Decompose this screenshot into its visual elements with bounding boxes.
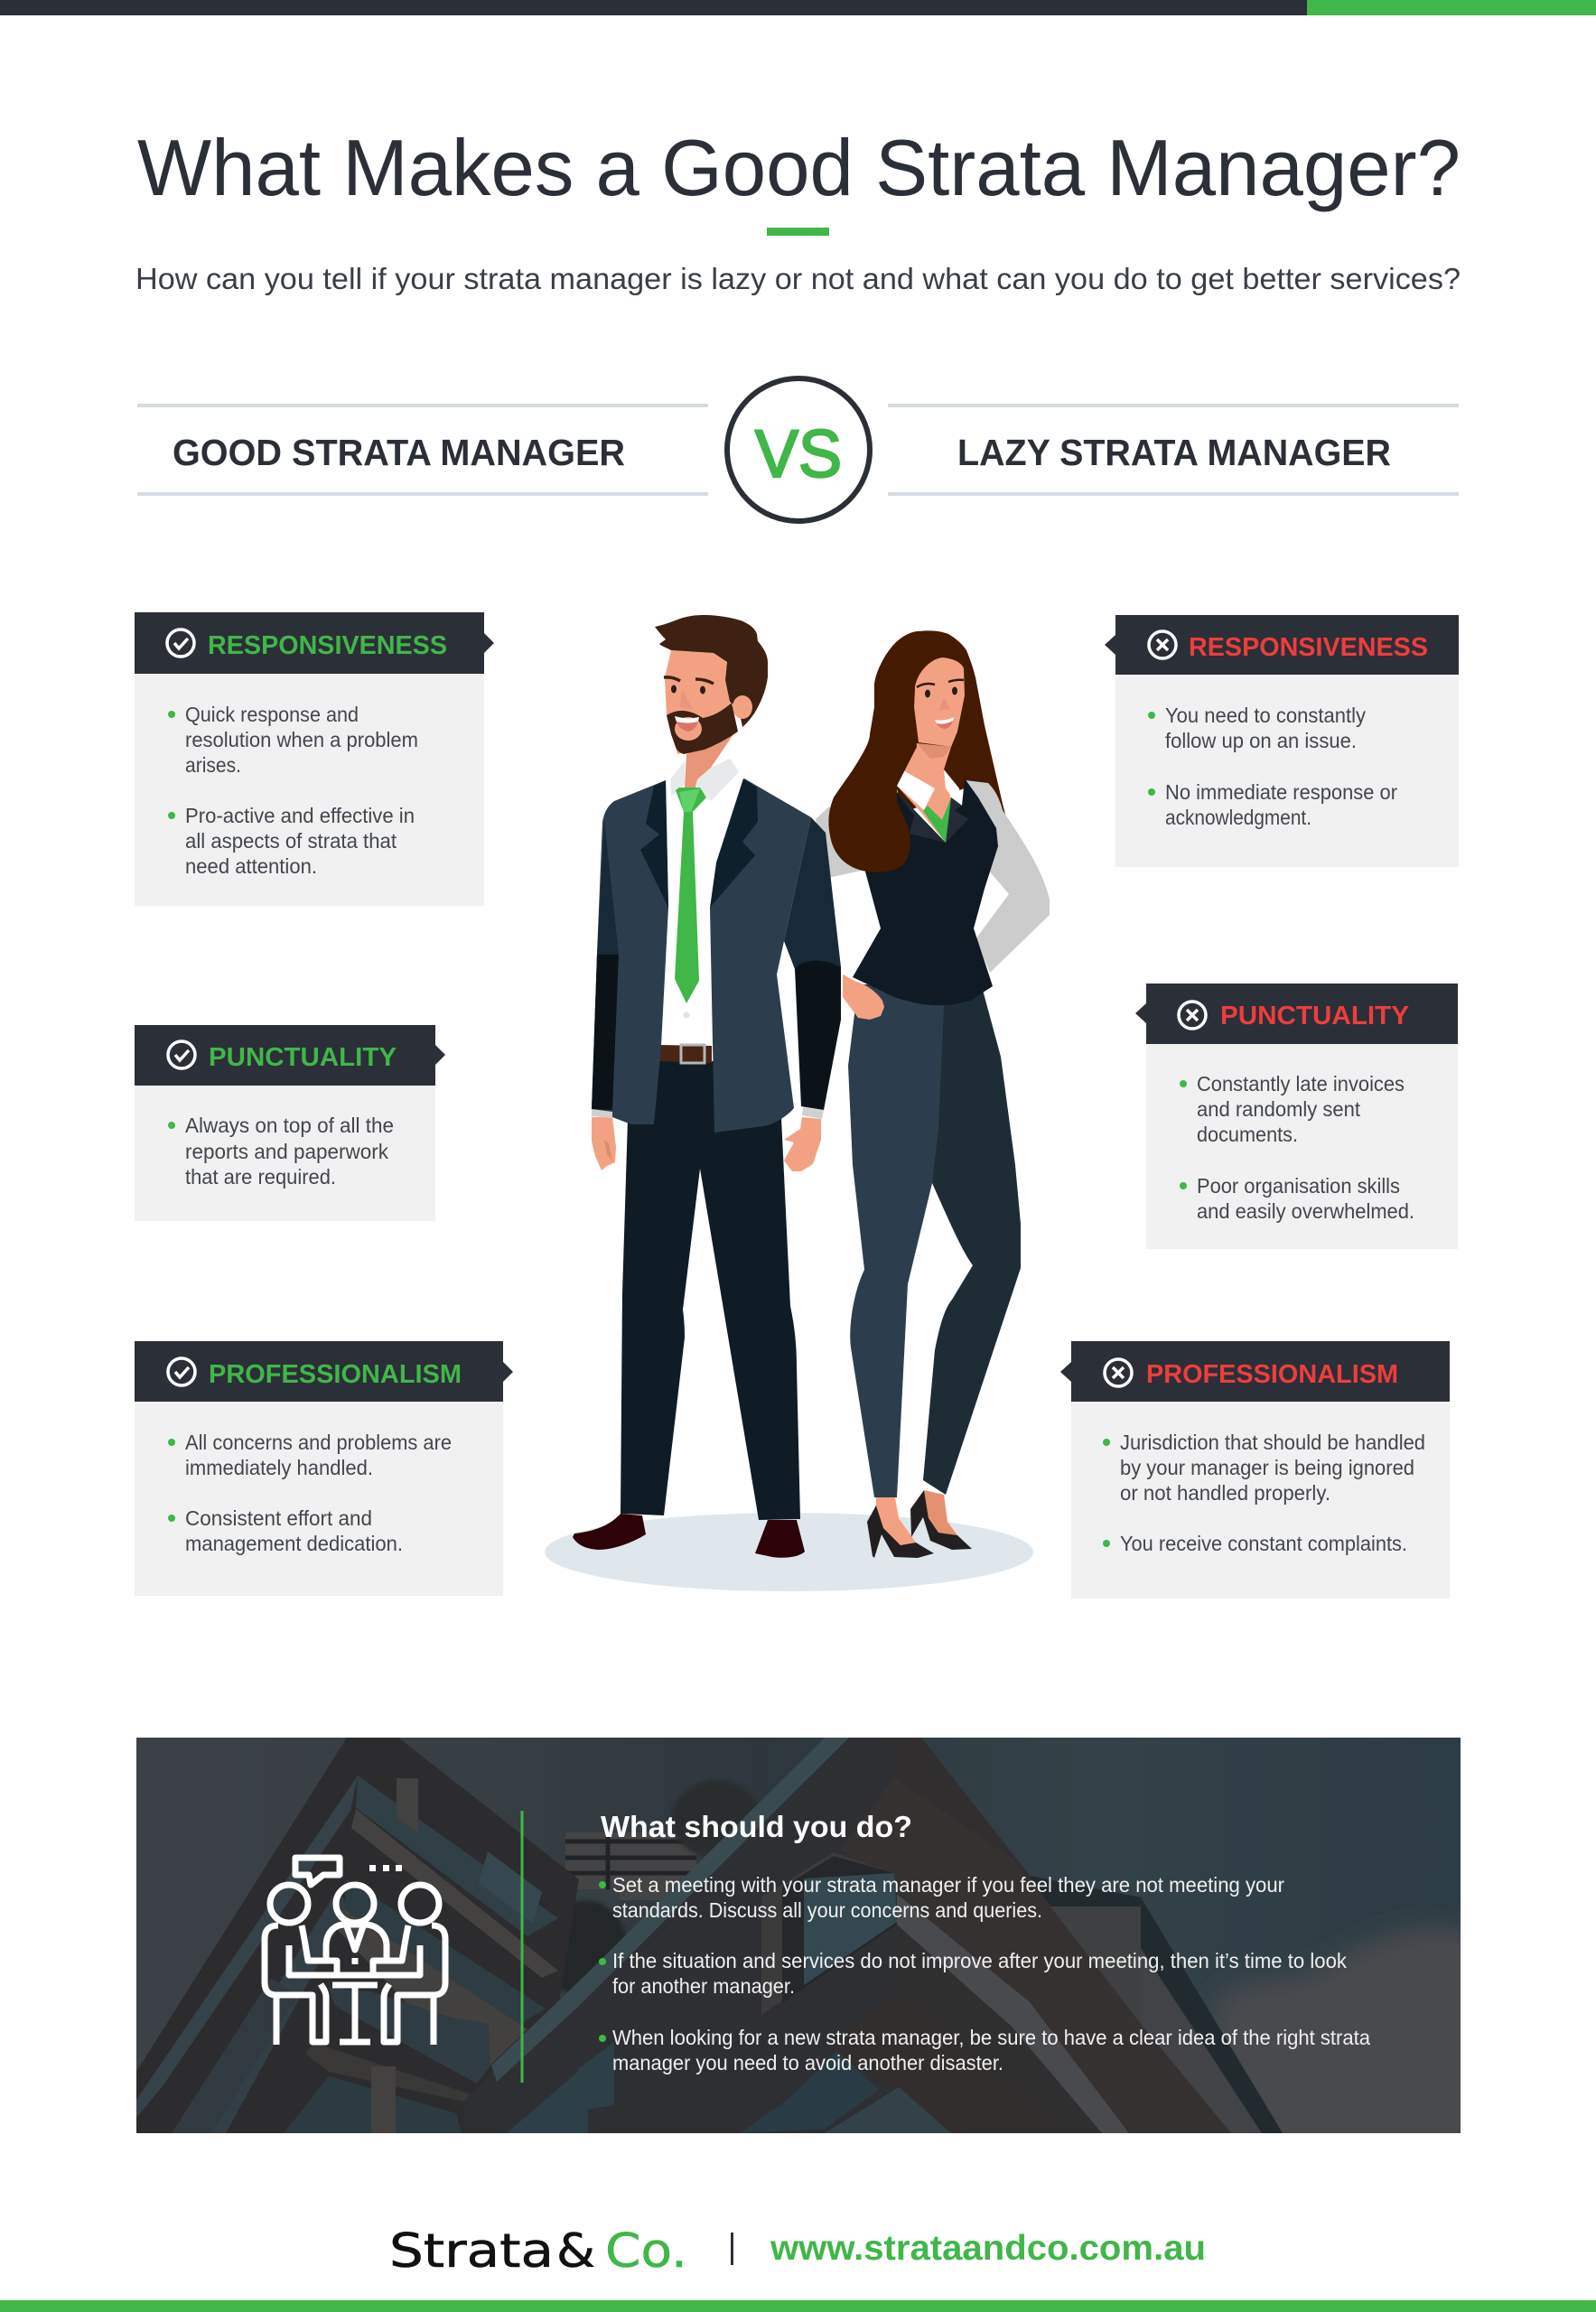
man tie (676, 788, 706, 812)
vs badge (727, 378, 870, 521)
man trousers (621, 1061, 800, 1520)
bullet list: standards. Discuss all your concerns and queries. (612, 1898, 1042, 1922)
footer divider (731, 2233, 733, 2265)
panel: what should you do (136, 1738, 1481, 2168)
footer logo (389, 2224, 687, 2279)
bullet list: Set a meeting with your strata manager if you feel they are not meeting your (612, 1873, 1284, 1897)
tower and trees (565, 1832, 696, 1900)
panel: good responsiveness: Quick response and (185, 703, 359, 726)
man hair (655, 615, 768, 727)
panel: lazy responsiveness: acknowledgment. (1165, 806, 1311, 829)
man ear (733, 695, 752, 719)
panel: good professionalism (135, 1341, 513, 1596)
panel: lazy punctuality: and easily overwhelmed. (1197, 1199, 1414, 1223)
panel: lazy responsiveness: RESPONSIVENESS (1189, 633, 1428, 662)
subtitle: How can you tell if your strata manager is lazy or not and what can you do to get better services? (135, 262, 1461, 295)
woman hand (843, 974, 884, 1020)
man belt (659, 1045, 712, 1063)
icon: meeting people (265, 1858, 445, 2045)
panel: lazy punctuality: and randomly sent (1197, 1097, 1361, 1121)
vs badge: VS (755, 416, 842, 491)
panel: lazy punctuality: Constantly late invoices (1197, 1072, 1405, 1095)
man collar (670, 761, 685, 797)
panel: good responsiveness: all aspects of strata that (185, 829, 397, 853)
woman trousers (923, 980, 1021, 1495)
footer logo: Strata (389, 2224, 554, 2279)
panel: lazy punctuality (1135, 984, 1458, 1249)
panel: lazy responsiveness (1105, 615, 1459, 867)
panel: good punctuality: PUNCTUALITY (209, 1043, 397, 1072)
panel: good punctuality (135, 1025, 445, 1221)
title accent dash (767, 228, 829, 236)
top bar (0, 0, 1596, 15)
icon: cross (1179, 1002, 1206, 1029)
heading: what should you do: What should you do? (601, 1810, 912, 1843)
panel: lazy responsiveness: You need to constantly (1165, 704, 1366, 727)
footer logo: Co. (605, 2224, 687, 2279)
window niche (761, 1852, 897, 2015)
panel: lazy punctuality: PUNCTUALITY (1220, 1002, 1409, 1030)
left building (136, 1738, 579, 2133)
icon: check (168, 1358, 195, 1385)
woman face (914, 657, 965, 747)
title: What Makes a Good Strata Manager? (137, 123, 1461, 212)
panel: good professionalism: Consistent effort and (185, 1506, 372, 1530)
man (573, 615, 841, 1558)
bullet list: When looking for a new strata manager, be sure to have a clear idea of the right strata (612, 2026, 1370, 2049)
photo: building background (136, 1738, 1481, 2168)
man shirt (659, 778, 743, 1046)
panel: good punctuality: that are required. (185, 1165, 336, 1189)
panel: lazy punctuality: documents. (1197, 1123, 1298, 1146)
woman shoes (876, 1497, 916, 1545)
panel: good responsiveness: need attention. (185, 854, 317, 878)
panel: good professionalism: All concerns and problems are (185, 1431, 452, 1454)
footer logo: & (556, 2224, 595, 2279)
panel: lazy professionalism: or not handled properly. (1120, 1481, 1330, 1505)
panel: good punctuality: Always on top of all the (185, 1114, 394, 1137)
man beard (667, 703, 738, 754)
icon: cross (1149, 631, 1176, 658)
man neck (685, 734, 733, 788)
panel: lazy responsiveness: follow up on an issue. (1165, 729, 1357, 752)
icon: check (167, 629, 194, 657)
panel: lazy professionalism: PROFESSIONALISM (1146, 1360, 1398, 1389)
woman chest (897, 743, 951, 843)
panel: lazy professionalism: Jurisdiction that should be handled (1120, 1431, 1425, 1454)
panel: lazy responsiveness: No immediate response or (1165, 780, 1397, 804)
woman vest (853, 778, 998, 1005)
panel: good punctuality: reports and paperwork (185, 1140, 388, 1163)
bottom bar (0, 2300, 1596, 2312)
footer url: www.strataandco.com.au (770, 2229, 1206, 2268)
woman (816, 630, 1050, 1558)
man lapels (640, 780, 668, 908)
bullet list: If the situation and services do not improve after your meeting, then it’s time to look (612, 1949, 1347, 1972)
man face (665, 650, 732, 754)
floor shadow (545, 1513, 1033, 1591)
divider line (520, 1811, 524, 2083)
heading: lazy strata manager: LAZY STRATA MANAGER (957, 432, 1391, 473)
bullet list: manager you need to avoid another disaster. (612, 2051, 1003, 2074)
panel: lazy professionalism (1060, 1341, 1450, 1599)
panel: good professionalism: immediately handled. (185, 1456, 373, 1479)
woman front hair (828, 631, 942, 872)
panel: good responsiveness (135, 612, 494, 906)
bullet list (599, 1873, 1370, 2074)
man eyes (671, 685, 677, 694)
man hands (592, 1117, 616, 1170)
panel: good professionalism: management dedication. (185, 1532, 403, 1555)
panel: good responsiveness: resolution when a problem (185, 728, 418, 751)
versus header (137, 378, 1459, 521)
panel: good professionalism: PROFESSIONALISM (209, 1360, 462, 1389)
panel: good responsiveness: Pro-active and effective in (185, 804, 415, 827)
man mouth (675, 716, 699, 732)
panel: good responsiveness: arises. (185, 753, 241, 777)
panel: lazy professionalism: You receive constant complaints. (1120, 1532, 1407, 1555)
man shoes (573, 1514, 646, 1550)
front building (464, 1738, 1050, 2133)
heading: good strata manager: GOOD STRATA MANAGER (173, 432, 625, 473)
panel: lazy punctuality: Poor organisation skills (1197, 1174, 1400, 1198)
bullet list: for another manager. (612, 1974, 795, 1998)
icon: check (168, 1041, 195, 1068)
illustration: two managers (545, 615, 1050, 1591)
icon: cross (1105, 1359, 1132, 1386)
roof slats and wall (1030, 1876, 1283, 2133)
man jacket (592, 780, 668, 1124)
panel: lazy professionalism: by your manager is being ignored (1120, 1456, 1414, 1479)
panel: good responsiveness: RESPONSIVENESS (208, 631, 447, 660)
